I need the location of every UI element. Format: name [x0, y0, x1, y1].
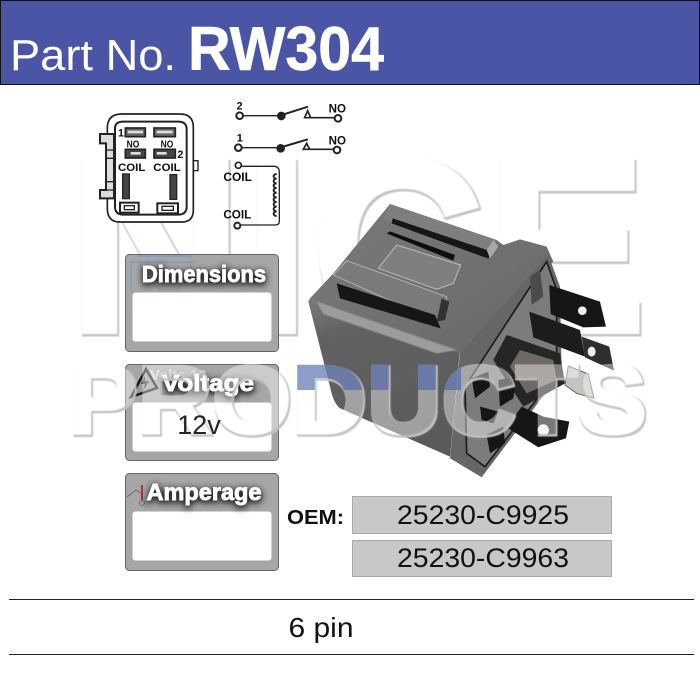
connector housing face [450, 255, 562, 477]
icon: amperage gauge sketch [127, 485, 144, 506]
watermark: PRODUCTS: PRODUCTS [68, 345, 647, 454]
pin labels: COIL [118, 162, 145, 174]
header part number: RW304 [188, 15, 384, 84]
switch 2 [236, 100, 346, 122]
panel: voltage [126, 364, 278, 460]
terminal 4 [507, 407, 569, 447]
panel: amperage: Amperage [146, 481, 262, 507]
relay product illustration [308, 204, 614, 477]
pin labels: 1 [118, 128, 124, 140]
watermark: PRODUCTS [73, 364, 647, 438]
relay body front face [308, 297, 460, 457]
icon: high voltage warning triangle [131, 369, 157, 397]
switch 1 [235, 133, 346, 153]
relay schematic [223, 100, 346, 229]
rule bottom [9, 654, 694, 655]
switch 1: NO [329, 133, 346, 147]
relay body top face [310, 204, 553, 353]
OEM number 2 [352, 540, 612, 576]
mottled moulding detail [472, 270, 543, 453]
connector pinout diagram [100, 114, 198, 222]
panel title: Voltage [162, 370, 254, 396]
panel: dimensions: Dimensions [142, 263, 266, 289]
rule top [9, 599, 694, 600]
OEM label: OEM: [287, 507, 344, 529]
watermark: PRODUCTS: PRODUCTS [68, 345, 647, 454]
switch 2: 2 [237, 100, 243, 112]
switch 1: 1 [237, 133, 243, 145]
voltage value: 12v [177, 410, 221, 440]
faint dimension drawing [131, 256, 196, 292]
terminal 3 [565, 366, 594, 398]
coil: COIL [223, 207, 251, 221]
panel: voltage: Voltage [162, 372, 254, 398]
terminal 2 [529, 312, 614, 371]
pin count: 6 pin [288, 612, 354, 643]
panel: dimensions [126, 254, 278, 352]
panel title: Dimensions [142, 261, 266, 287]
pin labels: COIL [153, 162, 181, 174]
pin labels: 2 [177, 149, 183, 161]
watermark: PRODUCTS: PRODUCTS [68, 345, 647, 454]
top rib near [333, 261, 449, 328]
panel: amperage [126, 474, 278, 570]
coil [223, 162, 279, 229]
top rib far [383, 204, 498, 261]
panel title: Amperage [146, 479, 262, 505]
terminal 1 [549, 285, 606, 327]
top window recess [378, 245, 461, 289]
header label: Part No.: Part No. [10, 31, 176, 80]
pin labels: NO [161, 139, 174, 150]
pin labels [118, 128, 183, 174]
OEM number 1 [352, 496, 612, 534]
highlight along front edge [317, 302, 457, 353]
switch 2: NO [329, 102, 346, 116]
OEM number 1: 25230-C9925 [397, 500, 569, 530]
pin labels: NO [127, 139, 140, 150]
OEM number 2: 25230-C9963 [397, 543, 569, 573]
watermark: NICE: NICE [68, 107, 647, 385]
coil: COIL [223, 170, 252, 184]
header banner [0, 0, 700, 84]
ghost label: Volts 12 [150, 367, 206, 384]
connector recess [493, 335, 565, 407]
